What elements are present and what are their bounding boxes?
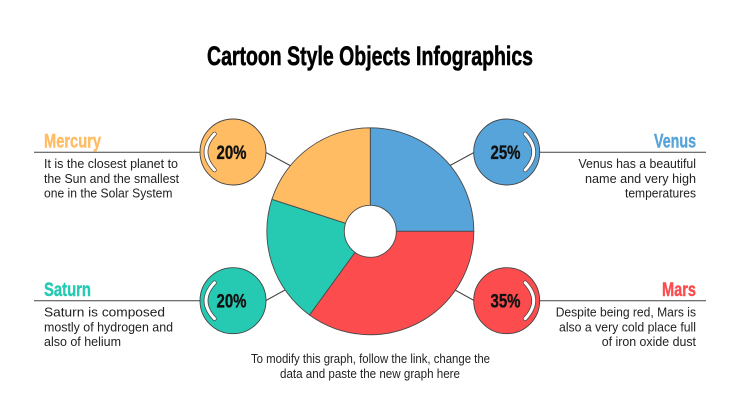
badge: Mercury 20%: 20% [216, 143, 247, 164]
badge: Saturn 20%: 20% [216, 292, 247, 312]
badge: Mars 35% [474, 268, 540, 334]
caption: data and paste the new graph here [280, 367, 460, 381]
slice: Mars 35% [310, 231, 474, 335]
text: Mercury description [44, 157, 179, 200]
heading: Mercury: Mercury [44, 130, 101, 152]
pie chart [267, 128, 474, 335]
text: Mercury description: It is the closest planet to [44, 157, 178, 171]
caption [251, 352, 490, 381]
text: Mercury description: one in the Solar System [44, 186, 172, 200]
badge: Venus 25%: 25% [490, 143, 521, 164]
text: Venus description: temperatures [625, 186, 696, 200]
text: Saturn description [44, 306, 173, 349]
slice: Venus 25% [370, 128, 474, 231]
badge: Venus 25% [474, 119, 540, 185]
heading: Saturn: Saturn [44, 279, 91, 301]
text: Venus description: name and very high [585, 172, 696, 186]
title: Cartoon Style Objects Infographics [207, 41, 533, 71]
connector lines from badges to pie [266, 152, 474, 300]
badge: Saturn 20% [200, 268, 266, 334]
panel: Saturn [34, 268, 266, 349]
pie centre hole [344, 205, 396, 257]
text: Mercury description: the Sun and the smallest [44, 172, 179, 186]
panel: Mercury [34, 119, 266, 200]
badge: Mars 35%: 35% [490, 292, 521, 312]
badge: Mercury 20% [200, 119, 266, 185]
heading: Mars: Mars [662, 279, 696, 301]
text: Venus description: Venus has a beautiful [578, 157, 696, 171]
slice: Saturn 20% [267, 199, 370, 315]
panel: Mars [474, 268, 706, 349]
caption: To modify this graph, follow the link, change the [251, 352, 490, 366]
heading: Venus: Venus [654, 130, 696, 152]
text: Mars description: Despite being red, Mars is [556, 306, 696, 320]
text: Venus description [578, 157, 696, 200]
text: Saturn description: also of helium [44, 335, 121, 349]
text: Mars description: of iron oxide dust [602, 335, 696, 349]
text: Saturn description: mostly of hydrogen and [44, 320, 173, 334]
text: Mars description [556, 306, 696, 349]
text: Mars description: also a very cold place full [559, 320, 696, 334]
text: Saturn description: Saturn is composed [44, 306, 165, 320]
slice: Mercury 20% [272, 128, 370, 231]
panel: Venus [474, 119, 706, 200]
